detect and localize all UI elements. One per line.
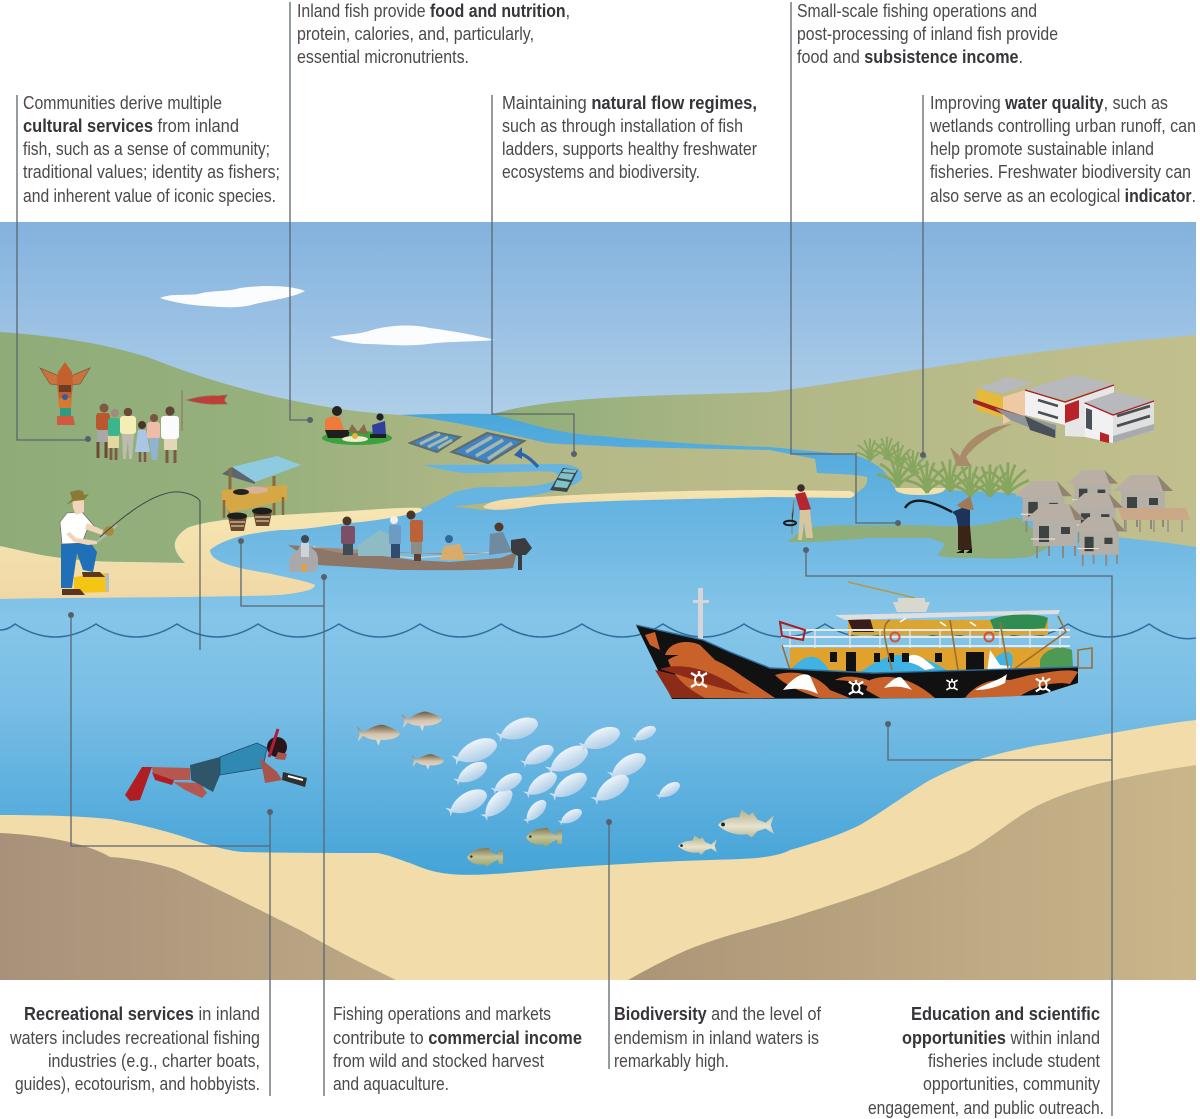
text: food and nutrition: essential micronutrients. xyxy=(297,46,469,67)
text: biodiversity xyxy=(614,1003,822,1071)
text: cultural services: traditional values; identity as fishers; xyxy=(23,161,280,182)
text: education and scientific opportunities: Education and scientific xyxy=(911,1003,1100,1024)
icon: totem pole xyxy=(40,362,90,425)
icon: urban building xyxy=(973,375,1154,443)
text: cultural services: and inherent value of iconic species. xyxy=(23,185,276,206)
text: recreational services: waters includes recreational fishing xyxy=(9,1027,260,1048)
text: recreational services xyxy=(9,1003,260,1094)
text: natural flow regimes: Maintaining natural flow regimes, xyxy=(502,92,757,113)
text: education and scientific opportunities xyxy=(868,1003,1104,1118)
bottom sand xyxy=(0,720,1196,980)
icon: family group xyxy=(96,404,179,463)
panel: landscape scene xyxy=(0,222,1196,980)
text: subsistence income: food and subsistence income. xyxy=(797,46,1023,67)
icon: runoff arrow xyxy=(950,424,1012,466)
text: education and scientific opportunities: fisheries include student xyxy=(928,1050,1100,1071)
text: biodiversity: endemism in inland waters is xyxy=(614,1027,819,1048)
icon: angler on box with rod xyxy=(60,490,200,650)
right brown mound xyxy=(628,765,1196,980)
leader line: water quality xyxy=(920,95,926,458)
leader line: recreational services xyxy=(68,612,273,1096)
leader line: commercial income xyxy=(238,538,327,1096)
text: recreational services: Recreational services in inland xyxy=(24,1003,260,1024)
leader line: education xyxy=(803,547,1112,1116)
sunfish xyxy=(467,828,562,866)
text: biodiversity: remarkably high. xyxy=(614,1050,729,1071)
leader line: subsistence income xyxy=(791,2,901,526)
leader line: biodiversity xyxy=(606,819,612,1069)
sand: left beach and crescent xyxy=(0,508,422,599)
icon: fish windsock flag xyxy=(182,390,227,431)
text: food and nutrition: Inland fish provide food and nutrition, xyxy=(297,0,570,21)
icon: fish ladder xyxy=(550,468,578,492)
fish school xyxy=(443,714,683,828)
icon: fish ponds xyxy=(410,432,524,463)
text: cultural services: Communities derive multiple xyxy=(23,92,222,113)
left brown mound xyxy=(0,833,396,980)
text: food and nutrition: protein, calories, and, particularly, xyxy=(297,23,534,44)
text: commercial income: contribute to commercial income xyxy=(333,1027,582,1048)
icon: blue arrow to ponds xyxy=(514,447,538,467)
text: water quality: help promote sustainable inland xyxy=(930,138,1154,159)
text: natural flow regimes: such as through installation of fish xyxy=(502,115,743,136)
leader line: food and nutrition xyxy=(290,2,313,423)
icon: wetland reeds xyxy=(856,437,1029,497)
text: food and nutrition xyxy=(297,0,570,67)
crew members xyxy=(341,516,355,555)
text: biodiversity: Biodiversity and the level of xyxy=(614,1003,822,1024)
text: water quality xyxy=(929,92,1196,206)
icon: woman with ring net xyxy=(784,484,813,540)
text: commercial income: from wild and stocked harvest xyxy=(333,1050,544,1071)
icon: stilt village xyxy=(1015,470,1190,566)
text: cultural services: fish, such as a sense of community; xyxy=(23,138,270,159)
net sack figure xyxy=(289,535,318,572)
left hill xyxy=(0,332,867,563)
text: cultural services: cultural services from inland xyxy=(23,115,239,136)
cloud: right xyxy=(330,326,495,345)
text: recreational services: industries (e.g., charter boats, xyxy=(48,1050,260,1071)
icon: market stall xyxy=(222,456,301,531)
text: water quality: also serve as an ecological indicator. xyxy=(930,185,1196,206)
text: education and scientific opportunities: opportunities, community xyxy=(923,1073,1101,1094)
text: commercial income: and aquaculture. xyxy=(333,1073,449,1094)
wave line xyxy=(0,624,1196,639)
text: water quality: Improving water quality, such as xyxy=(930,92,1168,113)
motor xyxy=(511,538,532,570)
text: natural flow regimes xyxy=(502,92,757,182)
text: recreational services: guides), ecotourism, and hobbyists. xyxy=(15,1073,260,1094)
text: subsistence income xyxy=(797,0,1058,67)
icon: picnic group xyxy=(322,406,392,445)
icon: fishing boat with crew xyxy=(288,510,532,572)
sky xyxy=(0,222,1196,415)
text: natural flow regimes: ladders, supports healthy freshwater xyxy=(502,138,757,159)
text: education and scientific opportunities: opportunities within inland xyxy=(902,1027,1100,1048)
text: natural flow regimes: ecosystems and biodiversity. xyxy=(502,161,700,182)
leader line: natural flow regimes xyxy=(492,95,577,457)
sand: river strip xyxy=(483,490,854,510)
text: subsistence income: post-processing of inland fish provide xyxy=(797,23,1058,44)
text: subsistence income: Small-scale fishing operations and xyxy=(797,0,1037,21)
icon: painted tour boat xyxy=(636,582,1092,699)
brown fish xyxy=(357,711,444,770)
text: commercial income: Fishing operations and markets xyxy=(333,1003,551,1024)
icon: fisher with pole xyxy=(905,496,974,553)
island xyxy=(787,517,1050,559)
icon: snorkel diver xyxy=(125,729,307,801)
water body xyxy=(0,414,1196,875)
text: commercial income xyxy=(333,1003,582,1094)
sand: reed bar xyxy=(895,488,945,495)
olive fish xyxy=(678,810,774,855)
leader line: cultural services xyxy=(17,95,91,442)
text: education and scientific opportunities: engagement, and public outreach. xyxy=(868,1097,1104,1118)
right hill xyxy=(493,335,1196,560)
inlet channel xyxy=(420,464,582,510)
cloud: left xyxy=(160,286,305,307)
text: cultural services xyxy=(23,92,280,206)
